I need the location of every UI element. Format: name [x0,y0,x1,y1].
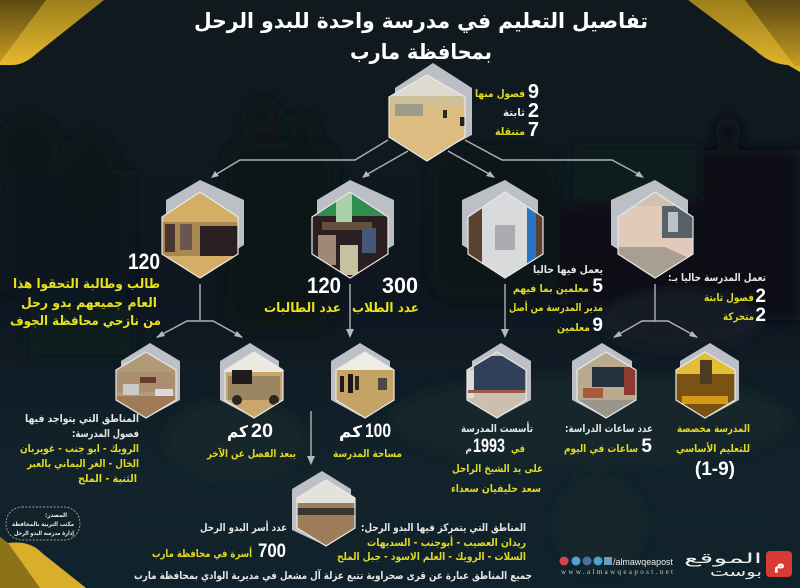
text: new students: من نازحي محافظة الجوف [10,314,161,329]
stats: classes: 9 [528,81,539,103]
text: teachers [509,264,603,336]
source box: مكتب التربية بالمحافظة [12,521,74,528]
text: 20 km: كم [227,422,249,441]
text: bedouin areas: السلات - الرويك - العلم الاسود - جبل الملح [337,551,526,563]
text: teachers: معلمين [557,322,590,334]
text: founding [451,421,543,495]
source box: إدارة مدرسة البدو الرحل [14,530,74,537]
stats: classes [475,81,539,141]
footer note: جميع المناطق عبارة عن قرى صحراوية تتبع عزلة آل مشعل في مديرية الوادي بمحافظة مارب [134,569,532,582]
text: basic education: المدرسة مخصصة [677,423,750,435]
text: study hours: 5 [641,436,652,457]
text: class locations: الخال - الغر اليماني بالعبر [26,458,139,470]
text: bedouin families: 700 [258,541,286,562]
text: class locations: المناطق التي يتواجد فيها [25,413,139,425]
text: 100 km: كم [339,422,363,441]
hexagon: desert camp [116,343,180,418]
text: current classes: 2 [755,305,766,326]
text: new students: العام جميعهم بدو رحل [21,296,157,311]
hexagon: students in class [312,180,394,278]
text: bedouin areas: ريدان العصيب - أبوجنب - السديهات [367,535,526,549]
text: teachers: يعمل فيها حاليا [533,264,603,276]
logo [684,551,792,580]
gold corner top left [0,0,104,65]
text: current classes: 2 [755,286,766,307]
hexagon: textbook [462,180,543,278]
text: founding: تأسست المدرسة [461,421,533,435]
text: new students [10,249,161,329]
gold corner bottom left [0,537,86,588]
text: current classes: تعمل المدرسة حاليا بـ: [668,272,766,284]
text: bedouin families [152,520,287,562]
title [194,9,648,64]
stats: classes: 7 [528,119,539,141]
logo: الموقع [684,551,762,567]
text: teachers: 5 [592,276,603,297]
logo: م [774,555,785,573]
text: new students: طالب وطالبة التحقوا هذا [13,277,160,292]
text: number of students: 300 [382,273,418,298]
text: number of students [264,273,419,316]
stats: classes: 2 [528,100,539,122]
text: new students: 120 [128,249,160,274]
connector arrows [156,140,698,465]
text: bedouin areas [337,522,526,563]
text: study hours [564,423,653,457]
text: founding: سعد حليفيان سعداء [451,483,541,495]
hexagon: truck [220,343,283,418]
text: 20 km [206,421,296,460]
stats: classes: فصول منها [475,88,525,100]
stats: classes: ثابتة [503,107,525,119]
text: basic education: للتعليم الأساسي [676,442,750,455]
hexagon: new students [162,180,244,278]
source box [6,507,80,540]
hexagon: blackboard 1 [467,343,531,418]
text: study hours: عدد ساعات الدراسة: [565,423,653,435]
text: class locations [20,413,139,485]
text: 100 km: 100 [365,421,391,442]
text: class locations: الرويك - ابو جنب - غويربان [20,443,139,455]
text: teachers: 9 [592,315,603,336]
text: 100 km: مساحة المدرسة [333,448,402,460]
text: teachers: معلمين بما فيهم [513,283,589,295]
gold corner top right [688,0,800,72]
text: basic education: (1-9) [695,459,735,480]
text: founding: 1993 [473,436,505,457]
hexagon: pupils in tent [676,343,739,418]
title: بمحافظة مارب [350,40,492,64]
text: number of students: عدد الطالبات [264,301,341,316]
text: bedouin areas: المناطق التي يتمركز فيها البدو الرحل: [361,522,526,534]
social handles: www.almawqeapost.net [561,568,673,576]
text: current classes: فصول ثابتة [704,292,754,304]
text: 20 km: 20 [251,421,273,442]
text: founding: على يد الشيخ الراحل [452,463,543,475]
title: تفاصيل التعليم في مدرسة واحدة للبدو الرحل [194,9,648,33]
hexagon: empty classroom [611,180,693,278]
source box: المصدر: [45,512,67,519]
stats: classes: متنقلة [495,126,525,138]
hexagon: school area [331,343,394,418]
text: number of students: 120 [307,273,341,298]
logo: بوست [710,565,762,580]
text: 100 km [333,421,402,460]
text: founding: في [511,443,525,455]
text: class locations: الثنية - الملح [78,473,137,485]
text: basic education [676,423,750,480]
text: bedouin families: عدد أسر البدو الرحل [200,520,287,534]
text: current classes: متحركة [723,311,754,323]
text: current classes [668,272,766,326]
social handles: /almawqeapost [613,557,673,567]
social handles [560,556,673,576]
text: 20 km: يبعد الفصل عن الآخر [206,447,296,460]
hexagon: blackboard 2 [572,343,636,418]
hexagon: bedouin tents [292,471,355,546]
text: teachers: مدير المدرسة من أصل [509,300,603,314]
text: class locations: فصول المدرسة: [72,428,139,440]
text: founding: م [465,445,472,455]
text: number of students: عدد الطلاب [352,301,419,316]
hexagon: school overview [389,63,472,161]
text: bedouin families: أسرة في محافظة مارب [152,546,252,560]
text: study hours: ساعات في اليوم [564,443,638,455]
